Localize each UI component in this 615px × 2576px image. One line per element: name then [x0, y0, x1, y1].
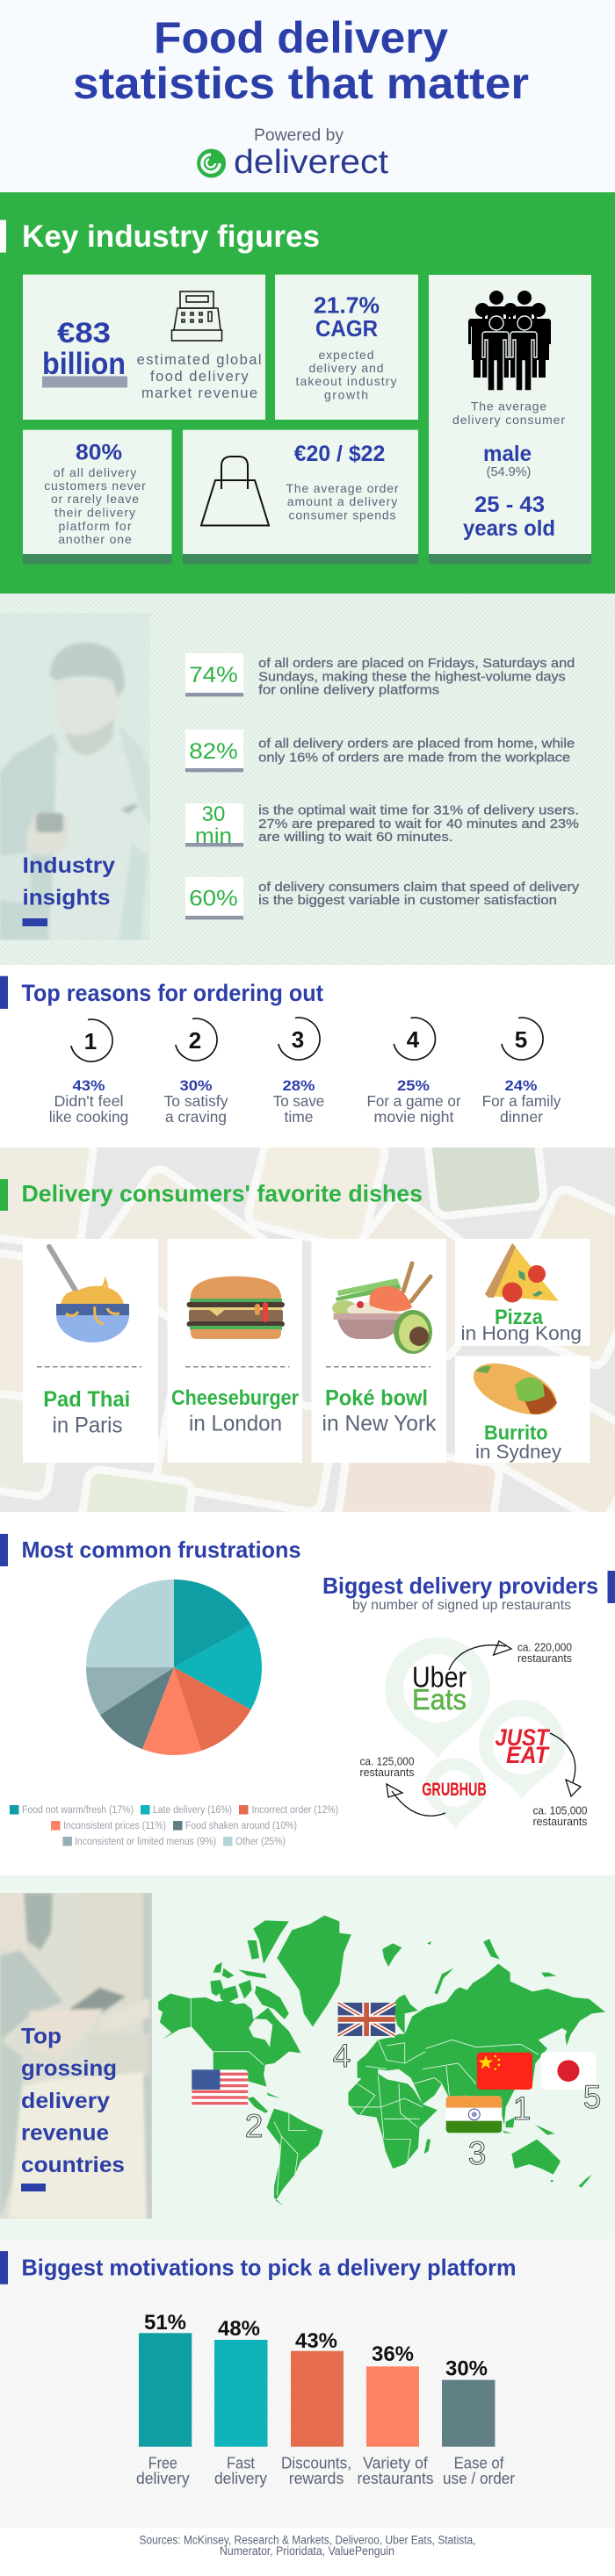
reason 3: To save: [273, 1092, 324, 1110]
bar: variety: restaurants: [357, 2470, 434, 2487]
card: market revenue: estimated global: [137, 352, 262, 368]
reason 3: 3: [292, 1026, 304, 1053]
provider: uber eats: ca. 220,000: [517, 1642, 572, 1654]
rank numbers: 3: [468, 2135, 486, 2171]
reason 4: 4: [407, 1026, 420, 1053]
reason 5: dinner: [500, 1108, 543, 1126]
icon: shopping bag: [201, 457, 269, 525]
card: market revenue: food delivery: [150, 369, 249, 385]
panel: key industry figures: [0, 192, 615, 594]
heading: Biggest motivations to pick a delivery platform: [21, 2255, 517, 2281]
heading: biggest delivery providers: by number of signed up restaurants: [352, 1598, 571, 1613]
reason 1: Didn't feel: [54, 1092, 123, 1110]
rank numbers: [245, 2038, 601, 2171]
heading: grossing: [21, 2056, 117, 2081]
card: pad thai: Pad Thai: [43, 1387, 130, 1412]
heading: delivery: [21, 2089, 110, 2113]
provider: uber eats: [385, 1637, 572, 1759]
card: CAGR: expected: [318, 348, 374, 362]
panel: biggest motivations: [0, 2239, 615, 2528]
reason 5: [482, 1018, 561, 1126]
card: CAGR: 21.7%: [314, 291, 380, 318]
bar: ease of use: [442, 2357, 515, 2487]
bar: variety: [357, 2342, 434, 2487]
heading accent: [0, 1179, 8, 1211]
sources footer: Numerator, Prioridata, ValuePenguin: [220, 2544, 394, 2558]
bar: fast delivery: [214, 2317, 267, 2487]
pie legend: [10, 1805, 338, 1847]
card: average consumer: delivery consumer: [452, 413, 565, 427]
provider: grubhub: restaurants: [360, 1767, 415, 1779]
heading: frustrations: Most common frustrations: [21, 1536, 300, 1563]
heading accent: [0, 1534, 8, 1566]
provider: just eat: JUST: [496, 1724, 551, 1751]
icon: pizza slice: [485, 1243, 559, 1303]
card: CAGR: [275, 275, 418, 420]
heading: revenue: [21, 2121, 109, 2146]
card: cheeseburger: Cheeseburger: [171, 1386, 299, 1410]
powered by label: Powered by: [254, 126, 344, 145]
reason 2: 2: [189, 1027, 201, 1054]
heading: countries: [21, 2153, 125, 2177]
stat: 82%: only 16% of orders are made from the workplace: [258, 751, 570, 765]
bar: variety: Variety of: [363, 2455, 429, 2472]
stat: 74%: for online delivery platforms: [258, 684, 439, 698]
card: burrito: [455, 1353, 590, 1463]
reason 1: like cooking: [49, 1108, 128, 1126]
title: statistics that matter: [73, 59, 529, 108]
card: platform loyalty: [23, 430, 172, 565]
card: average consumer: male: [483, 442, 532, 466]
reason 1: 1: [84, 1028, 97, 1054]
rank numbers: 4: [333, 2038, 351, 2074]
reason 4: movie night: [374, 1108, 454, 1126]
provider: grubhub: GRUBHUB: [422, 1780, 487, 1800]
bar: discounts: rewards: [289, 2470, 344, 2487]
heading: Key industry figures: [22, 219, 320, 254]
pie chart: [86, 1579, 262, 1755]
reason 3: [273, 1018, 324, 1126]
provider: uber eats: Eats: [412, 1683, 467, 1716]
provider: just eat: ca. 105,000: [532, 1805, 588, 1817]
panel: top grossing countries: [0, 1875, 615, 2239]
stat: 30 min: [185, 802, 579, 848]
card: platform loyalty: their delivery: [54, 506, 135, 520]
heading: [23, 853, 115, 926]
card: pad thai: [23, 1239, 158, 1463]
icon: burrito: [467, 1353, 563, 1425]
provider: uber eats: Uber: [412, 1661, 467, 1694]
card: platform loyalty: of all delivery: [54, 465, 136, 479]
stat: 60%: of delivery consumers claim that speed of delivery: [258, 881, 580, 895]
heading accent: [0, 976, 8, 1009]
pie legend: Incorrect order (12%): [252, 1805, 338, 1816]
bar: ease of use: use / order: [443, 2470, 515, 2487]
provider: just eat: restaurants: [532, 1816, 587, 1828]
card: CAGR: delivery and: [309, 361, 383, 375]
reason 2: 30%: [179, 1077, 213, 1094]
arrow: [387, 1784, 445, 1816]
provider: grubhub: [360, 1756, 487, 1829]
bar: free delivery: 51%: [144, 2311, 186, 2335]
bar: fast delivery: delivery: [214, 2470, 267, 2487]
flag: united states: [192, 2069, 248, 2107]
reason 1: [49, 1019, 128, 1126]
card: cheeseburger: in London: [189, 1412, 282, 1436]
deliverect logo: deliverect: [234, 144, 388, 181]
card: average consumer: [429, 275, 591, 565]
stat: 74%: 74%: [189, 663, 238, 687]
title: [73, 13, 529, 108]
reason 2: [163, 1018, 228, 1126]
bar: discounts: Discounts,: [281, 2455, 351, 2472]
bar: fast delivery: Fast: [227, 2455, 255, 2472]
icon: burger: [186, 1277, 285, 1339]
flag: japan: [540, 2053, 597, 2090]
reason 4: For a game or: [367, 1092, 461, 1110]
reason 5: 5: [515, 1026, 527, 1053]
stat: 60%: 60%: [189, 887, 238, 911]
card: platform loyalty: customers never: [44, 479, 146, 493]
bar: fast delivery: 48%: [218, 2317, 260, 2341]
card: CAGR: growth: [324, 388, 368, 402]
flag: india: [446, 2096, 502, 2133]
reason 2: a craving: [165, 1108, 227, 1126]
panel: favorite dishes: [0, 1148, 615, 1512]
card: average order: €20 / $22: [294, 442, 385, 466]
stat: 82%: of all delivery orders are placed from home, while: [258, 738, 575, 752]
bar: free delivery: Free: [148, 2455, 177, 2472]
card: market revenue: €83: [57, 317, 111, 349]
heading: Top reasons for ordering out: [21, 980, 323, 1006]
provider: just eat: EAT: [506, 1742, 550, 1768]
panel: top reasons for ordering out: [0, 965, 615, 1148]
icon: poke bowl: [332, 1263, 432, 1354]
pie legend: Food not warm/fresh (17%): [22, 1805, 134, 1816]
background photo: takeaway trays: [0, 1148, 615, 1512]
heading: Industry: [23, 853, 115, 878]
card: average order: [183, 430, 418, 565]
pie legend: Inconsistent or limited menus (9%): [75, 1837, 216, 1847]
arrow: [449, 1641, 511, 1670]
bar: free delivery: delivery: [136, 2470, 190, 2487]
panel: industry insights: [0, 594, 615, 965]
provider: grubhub: ca. 125,000: [360, 1756, 415, 1768]
reason 5: 24%: [504, 1077, 538, 1094]
stat: 60%: is the biggest variable in customer satisfaction: [258, 894, 557, 908]
reason 1: 43%: [72, 1077, 105, 1094]
card: average consumer: years old: [463, 516, 555, 541]
card: platform loyalty: platform for: [58, 519, 132, 533]
rank numbers: 1: [513, 2090, 531, 2126]
stat: 30 min: min: [195, 824, 232, 848]
reason 2: To satisfy: [163, 1092, 228, 1110]
stat: 30 min: 27% are prepared to wait for 40 minutes and 23%: [258, 817, 579, 831]
pie legend: Food shaken around (10%): [185, 1821, 297, 1831]
card: burrito: in Sydney: [475, 1441, 561, 1463]
bar chart: [136, 2311, 515, 2487]
pie legend: Late delivery (16%): [153, 1805, 232, 1816]
card: average consumer: (54.9%): [487, 465, 531, 479]
card: pizza: in Hong Kong: [461, 1322, 582, 1344]
reason 5: For a family: [482, 1092, 561, 1110]
card: average order: consumer spends: [288, 507, 395, 522]
bar: ease of use: 30%: [445, 2357, 488, 2381]
header background: [0, 0, 615, 192]
bar: discounts: [281, 2329, 351, 2487]
card: average order: amount a delivery: [287, 494, 397, 508]
photo: hand with phone and shopping bag: [0, 1893, 152, 2219]
card: average order: The average order: [286, 481, 399, 495]
title: Food delivery: [154, 13, 448, 62]
provider: just eat: [479, 1700, 588, 1828]
card: market revenue: [23, 275, 265, 420]
arrow: [550, 1733, 581, 1796]
card: poke bowl: [311, 1239, 446, 1463]
card: CAGR: CAGR: [315, 315, 378, 342]
card: average consumer: 25 - 43: [474, 493, 545, 517]
bar: free delivery: [136, 2311, 192, 2487]
heading accent: [0, 2251, 8, 2285]
sources footer: Sources: McKinsey, Research & Markets, Deliveroo, Uber Eats, Statista,: [139, 2534, 476, 2547]
stat: 30 min: is the optimal wait time for 31% of delivery users.: [258, 804, 579, 818]
bar: variety: 36%: [372, 2342, 414, 2366]
photo: man looking at phone: [0, 613, 150, 940]
card: pad thai: in Paris: [53, 1414, 123, 1438]
reason 3: 28%: [283, 1077, 315, 1094]
pie legend: Inconsistent prices (11%): [63, 1821, 166, 1831]
heading: Delivery consumers' favorite dishes: [21, 1181, 423, 1207]
heading: [21, 2025, 125, 2191]
stat: 74%: [185, 653, 575, 698]
heading: insights: [23, 886, 111, 910]
flag: united kingdom: [338, 2003, 395, 2036]
bar: ease of use: Ease of: [454, 2455, 504, 2472]
reason 4: 25%: [397, 1077, 430, 1094]
stat: 82%: [185, 730, 575, 772]
card: CAGR: takeout industry: [295, 374, 397, 388]
flag: china: [477, 2053, 532, 2090]
card: pizza: Pizza: [495, 1306, 544, 1329]
provider: uber eats: restaurants: [517, 1652, 572, 1665]
sources footer: [0, 2528, 615, 2576]
card: platform loyalty: 80%: [76, 440, 122, 464]
card: pizza: [455, 1239, 590, 1346]
icon: noodle bowl: [49, 1247, 129, 1342]
heading accent: [0, 220, 6, 253]
reason 4: [367, 1018, 461, 1126]
icon: group of people: [468, 291, 551, 391]
icon: cash register: [172, 291, 221, 341]
card: burrito: Burrito: [484, 1421, 548, 1443]
card: platform loyalty: or rarely leave: [51, 492, 139, 506]
stat: 74%: Sundays, making these the highest-volume days: [258, 671, 566, 685]
card: market revenue: market revenue: [141, 385, 257, 401]
world map: [158, 1916, 605, 2205]
card: market revenue: billion: [42, 347, 126, 381]
card: cheeseburger: [168, 1239, 302, 1463]
pie legend: Other (25%): [235, 1837, 286, 1847]
heading: biggest delivery providers: Biggest delivery providers: [322, 1572, 598, 1599]
card: poke bowl: Poké bowl: [325, 1386, 428, 1411]
stat: 30 min: 30: [202, 802, 225, 826]
bar: discounts: 43%: [295, 2329, 337, 2353]
card: platform loyalty: another one: [58, 532, 132, 546]
rank numbers: 2: [245, 2108, 263, 2144]
heading: Top: [21, 2025, 62, 2049]
stat: 30 min: are willing to wait 60 minutes.: [258, 831, 453, 845]
rank numbers: 5: [583, 2079, 601, 2115]
heading: biggest delivery providers: [322, 1571, 615, 1613]
card: average consumer: The average: [471, 399, 546, 413]
card: poke bowl: in New York: [322, 1412, 437, 1436]
stat: 74%: of all orders are placed on Fridays, Saturdays and: [258, 657, 575, 671]
reason 3: time: [285, 1108, 313, 1126]
stat: 82%: 82%: [189, 739, 238, 764]
stat: 60%: [185, 877, 580, 919]
panel: frustrations and providers: [0, 1512, 615, 1875]
